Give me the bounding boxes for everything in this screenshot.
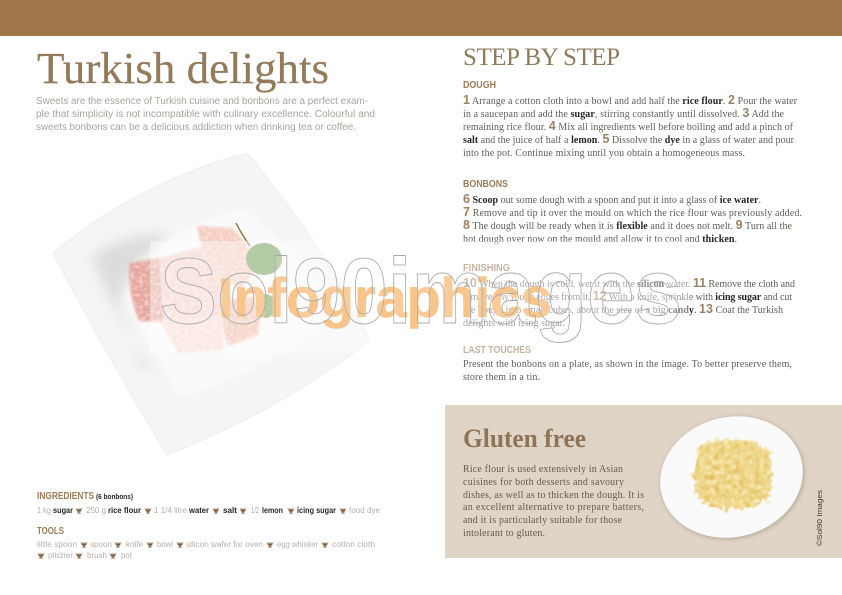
panel text (463, 464, 644, 539)
plate body (53, 153, 370, 455)
section: last touches (463, 345, 792, 383)
section: finishing: the dough into small cubes, about the size of a big candy. 13 Coat the Turkish (463, 302, 783, 316)
tools: spoon (90, 540, 112, 549)
panel: gluten free (445, 401, 842, 558)
section: finishing: FINISHING (463, 263, 510, 274)
panel text: dishes, as well as to thicken the dough. It is (463, 490, 644, 501)
photo: plate of rice flour (647, 401, 817, 554)
section: bonbons: BONBONS (463, 179, 508, 190)
section: bonbons: 7 Remove and tip it over the mould on which the rice flour was previously added. (463, 205, 802, 219)
section: dough: 1 Arrange a cotton cloth into a bowl and add half the rice flour. 2 Pour the water (463, 93, 798, 107)
section: last touches: LAST TOUCHES (463, 345, 531, 356)
step by step heading: STEP BY STEP (463, 44, 620, 71)
intro text (36, 96, 375, 133)
intro text: ple that simplicity is not incompatible with culinary excellence. Colourful and (36, 109, 375, 120)
section: last touches: Present the bonbons on a plate, as shown in the image. To better preserve them, (463, 359, 792, 370)
photo: square plate with Turkish delights (53, 153, 370, 455)
section: finishing: 10 When the dough is cold, wet it with the silicon water. 11 Remove the cloth and (463, 276, 795, 290)
ingredients: 1 1/4 litre (154, 506, 188, 515)
panel text: Rice flour is used extensively in Asian (463, 464, 623, 475)
top banner (0, 0, 842, 36)
ingredients: food dye (349, 506, 381, 515)
tools: brush (87, 551, 107, 560)
candy: centre cube (160, 246, 232, 322)
section: dough: DOUGH (463, 80, 496, 91)
ingredients: rice flour (108, 506, 141, 515)
ingredients: 250 g (86, 506, 106, 515)
credit: ©Sol90 Images (815, 490, 824, 546)
panel text: intolerant to gluten. (463, 528, 545, 539)
candy: bottom cube (160, 316, 224, 353)
section: dough: salt and the juice of half a lemon. 5 Dissolve the dye in a glass of water and pour (463, 132, 795, 146)
section: bonbons: hot dough over now on the mould and allow it to cool and thicken. (463, 234, 737, 245)
ingredients: INGREDIENTS (37, 491, 94, 502)
ingredients (37, 491, 381, 515)
tools: pitcher (48, 551, 73, 560)
candy: right cube (222, 296, 262, 346)
candy: left cube (129, 258, 164, 322)
panel text: an excellent alternative to prepare batters, (463, 502, 644, 513)
section: last touches: store them in a tin. (463, 372, 540, 383)
panel heading: Gluten free (463, 423, 586, 453)
ingredients: lemon (262, 506, 283, 515)
watermark: Infographics: Infographics (218, 267, 552, 329)
section: finishing: delights with icing sugar. (463, 318, 565, 329)
intro text: sweets bonbons can be a delicious addiction when drinking tea or coffee. (36, 122, 356, 133)
tools: bowl (157, 540, 173, 549)
section: bonbons: 8 The dough will be ready when it is flexible and it does not melt. 9 Turn all the (463, 218, 793, 232)
plate well (113, 208, 343, 397)
watermark (150, 239, 690, 353)
panel text: cuisines for both desserts and savoury (463, 477, 624, 488)
section: dough: into the pot. Continue mixing until you obtain a homogeneous mass. (463, 148, 745, 159)
title: Turkish delights (37, 44, 329, 93)
section: finishing: remove any rough edges from it. 12 With a knife, sprinkle with icing sugar and cut (463, 289, 792, 303)
tools: knife (126, 540, 144, 549)
leaf (236, 223, 282, 318)
section: bonbons: 6 Scoop out some dough with a spoon and put it into a glass of ice water. (463, 192, 761, 206)
tools: TOOLS (37, 526, 64, 537)
ingredients: (6 bonbons) (96, 492, 133, 501)
tools: egg whisker (277, 540, 318, 549)
tools: cotton cloth (332, 540, 375, 549)
tools (37, 526, 375, 560)
candy: top piece (197, 226, 262, 290)
section: dough: in a saucepan and add the sugar, stirring constantly until dissolved. 3 Add the (463, 106, 785, 120)
section: finishing (463, 263, 795, 329)
section: bonbons (463, 179, 802, 245)
tools: pot (121, 551, 133, 560)
ingredients: salt (223, 506, 237, 515)
intro text: Sweets are the essence of Turkish cuisine and bonbons are a perfect exam- (36, 96, 368, 107)
tools: little spoon (37, 540, 77, 549)
ingredients: 1/2 (251, 506, 259, 515)
section: dough: remaining rice flour. 4 Mix all ingredients well before boiling and add a pinch of (463, 119, 794, 133)
section: dough (463, 80, 798, 159)
tools: silicon wafer for oven (186, 540, 263, 549)
ingredients: icing sugar (297, 506, 336, 515)
plate shadow (92, 234, 170, 372)
panel text: and it is particularly suitable for those (463, 515, 623, 526)
ingredients: 1 kg (37, 506, 51, 515)
ingredients: water (188, 506, 209, 515)
watermark: Sol90images: Sol90images (160, 239, 682, 343)
ingredients: sugar (53, 506, 73, 515)
